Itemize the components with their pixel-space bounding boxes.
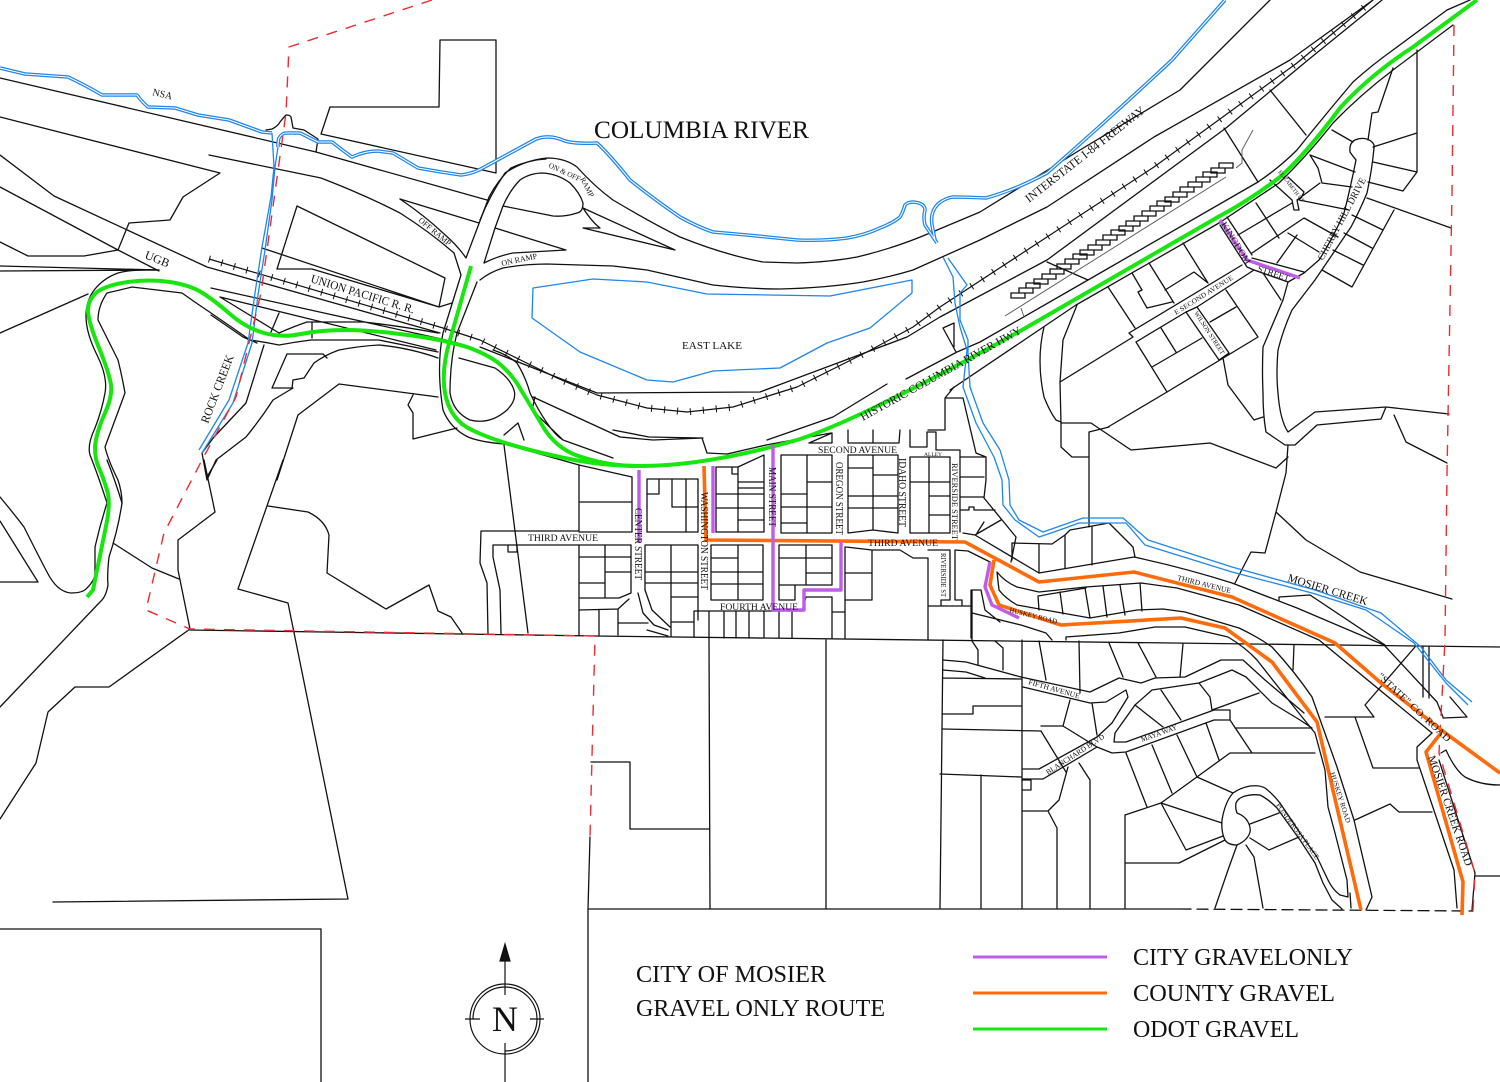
- north arrow compass: N: [492, 999, 518, 1039]
- label: Interstate I-84 Freeway: INTERSTATE I-84 FREEWAY: [1022, 103, 1148, 205]
- label: Off ramp: OFF RAMP: [417, 216, 453, 248]
- label: Fifth Avenue: FIFTH AVENUE: [1027, 677, 1081, 701]
- label: Fourth Avenue: FOURTH AVENUE: [720, 603, 798, 613]
- legend item: county gravel: COUNTY GRAVEL: [1133, 981, 1335, 1007]
- label: Riverside St: RIVERSIDE ST: [939, 553, 947, 598]
- label: Washington Street: WASHINGTON STREET: [698, 492, 709, 590]
- label: Oregon Street: OREGON STREET: [833, 462, 844, 535]
- legend item: ODOT gravel: ODOT GRAVEL: [1133, 1017, 1299, 1043]
- label: Union Pacific R.R.: UNION PACIFIC R. R.: [309, 271, 416, 316]
- legend: [973, 945, 1353, 1043]
- label: East Lake: EAST LAKE: [682, 341, 742, 352]
- label: Third Avenue center: THIRD AVENUE: [868, 539, 938, 549]
- label: Historic Columbia River Hwy: HISTORIC COLUMBIA RIVER HWY: [859, 325, 1024, 424]
- label: On ramp: ON RAMP: [501, 252, 538, 268]
- label: Maya Way: MAYA WAY: [1140, 722, 1179, 744]
- label: On and off ramp: ON & OFF: [547, 161, 582, 183]
- label: UGB: UGB: [143, 248, 172, 270]
- label: Huskey Road lower: HUSKEY ROAD: [1328, 771, 1352, 824]
- label: Street on Kingdom: STREET: [1256, 263, 1292, 283]
- railroad: [209, 0, 1373, 412]
- label: State Co. Road: "STATE" CO. ROAD: [1375, 671, 1453, 745]
- label: Mosier Creek Road: MOSIER CREEK ROAD: [1425, 754, 1474, 868]
- map title: [636, 962, 885, 1022]
- label: Wilson Street: WILSON STREET: [1192, 310, 1225, 356]
- label: Huskey Road upper: HUSKEY ROAD: [1009, 606, 1058, 626]
- label: Main Street: MAIN STREET: [766, 467, 777, 527]
- label: Third Avenue west: THIRD AVENUE: [528, 534, 598, 544]
- street grid of town: [190, 387, 1500, 1082]
- water: creeks and East Lake: [199, 133, 1472, 705]
- Ponderosa Place road and cul-de-sac: [1222, 786, 1351, 909]
- urban growth boundary dashed line: [146, 0, 1475, 910]
- route: county gravel: [704, 466, 1500, 915]
- label: Idaho Street: IDAHO STREET: [896, 458, 907, 527]
- label: Rock Creek: ROCK CREEK: [198, 353, 237, 425]
- label: NSA: NSA: [151, 87, 174, 103]
- water: Columbia River channel: [0, 0, 1225, 243]
- label: Mosier Creek: MOSIER CREEK: [1286, 572, 1370, 608]
- southeast subdivision roads and parcels: [940, 523, 1500, 911]
- map title: GRAVEL ONLY ROUTE: [636, 996, 885, 1022]
- label: On and off ramp, second part: RAMP: [578, 176, 596, 199]
- label: Riverside Street: RIVERSIDE STREET: [950, 463, 959, 540]
- label: Third Avenue east: THIRD AVENUE: [1177, 573, 1232, 595]
- legend item: city gravel: CITY GRAVELONLY: [1133, 945, 1353, 971]
- label: Center Street: CENTER STREET: [632, 508, 643, 580]
- left road edge: outer and inner loop edges: [86, 270, 438, 503]
- label: Elizabeth Ct: ELIZABETH CT: [1276, 170, 1305, 204]
- label: Blanchard Blvd: BLANCHARD BLVD: [1044, 732, 1107, 777]
- route: ODOT gravel: [87, 0, 1477, 597]
- map title: CITY OF MOSIER: [636, 962, 826, 988]
- route: city gravel: [639, 220, 1300, 618]
- label: Cherry Hill Drive: CHERRY HILL DRIVE: [1316, 176, 1369, 262]
- Cherry Hill Drive edges: [1262, 148, 1449, 463]
- north arrow compass: [465, 944, 544, 1082]
- buildings along the highway: [1005, 130, 1253, 317]
- label: Kingdom: KINGDOM: [1219, 220, 1253, 266]
- map labels: [143, 87, 1474, 868]
- label: E Second Avenue: E SECOND AVENUE: [1173, 274, 1235, 317]
- northeast subdivision roads and parcels: [943, 50, 1452, 599]
- label: Columbia River: COLUMBIA RIVER: [594, 117, 809, 144]
- label: Alley: ALLEY: [924, 452, 942, 458]
- label: Second Avenue: SECOND AVENUE: [818, 445, 898, 455]
- label: Ponderosa Place: PONDEROSA PLACE: [1274, 801, 1321, 861]
